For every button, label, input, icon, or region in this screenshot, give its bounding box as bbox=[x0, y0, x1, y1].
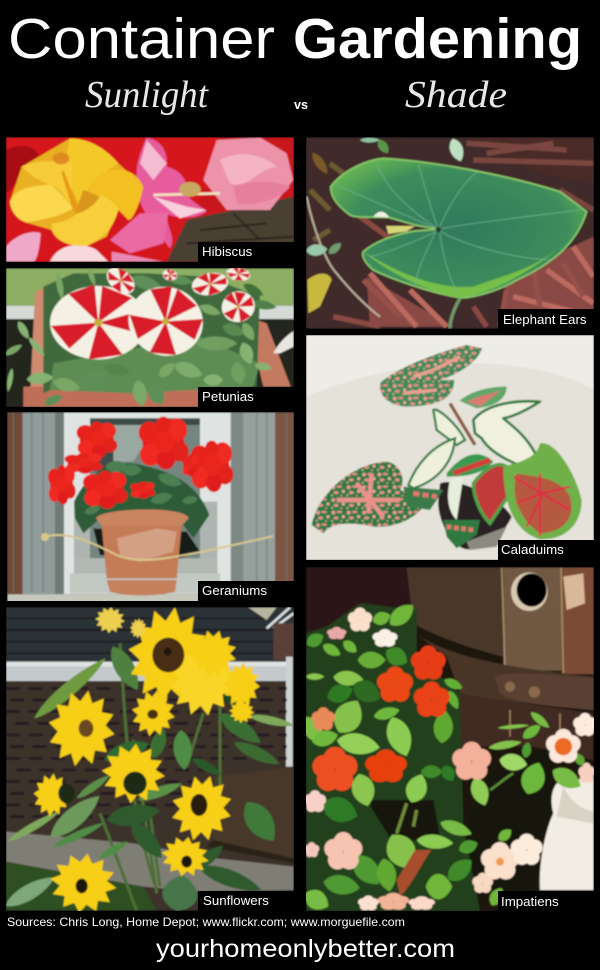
caption: Elephant Ears: Elephant Ears bbox=[503, 312, 587, 327]
caption: Sunflowers bbox=[198, 891, 294, 911]
caption: Impatiens: Impatiens bbox=[501, 894, 559, 909]
sources note: Sources: Chris Long, Home Depot; www.flickr.com; www.morguefile.com bbox=[7, 915, 405, 929]
photo: caladium plant bbox=[306, 335, 594, 560]
panel: Caladiums bbox=[306, 335, 594, 560]
footer website: yourhomeonlybetter.com bbox=[156, 935, 455, 963]
panel: Impatiens bbox=[298, 567, 597, 915]
caption: Hibiscus bbox=[198, 242, 294, 262]
caption: Elephant Ears bbox=[498, 309, 594, 329]
panel: Hibiscus bbox=[6, 137, 294, 262]
subtitle: vs: vs bbox=[294, 98, 308, 112]
caption: Petunias bbox=[198, 387, 294, 407]
title bbox=[8, 7, 582, 71]
caption: Hibiscus: Hibiscus bbox=[202, 244, 253, 259]
photo: petunias in a planter bbox=[3, 262, 294, 408]
caption: Caladiums: Caladuims bbox=[501, 542, 564, 557]
photo: sunflowers against a brick house bbox=[2, 602, 295, 918]
caption: Geraniums: Geraniums bbox=[202, 583, 267, 598]
title: Gardening bbox=[293, 7, 582, 71]
caption: Sunflowers: Sunflowers bbox=[203, 893, 269, 908]
caption: Impatiens bbox=[498, 891, 594, 911]
panel: Elephant Ears bbox=[306, 137, 594, 329]
photo: elephant ear leaf on mulch bbox=[306, 137, 594, 329]
caption: Geraniums bbox=[198, 581, 294, 601]
title: Container bbox=[8, 7, 275, 71]
subtitle: Sunlight: Sunlight bbox=[85, 74, 209, 116]
subtitle: Shade: Shade bbox=[405, 74, 507, 116]
photo: geraniums in a terracotta pot bbox=[7, 412, 294, 602]
photo: hibiscus flowers bbox=[6, 137, 294, 262]
panel: Geraniums bbox=[7, 412, 294, 602]
caption: Petunias: Petunias bbox=[202, 389, 254, 404]
panel: Sunflowers bbox=[2, 602, 295, 918]
panel: Petunias bbox=[3, 262, 294, 408]
caption: Caladiums bbox=[498, 540, 594, 560]
photo: impatiens beside a barrel bbox=[298, 567, 597, 915]
